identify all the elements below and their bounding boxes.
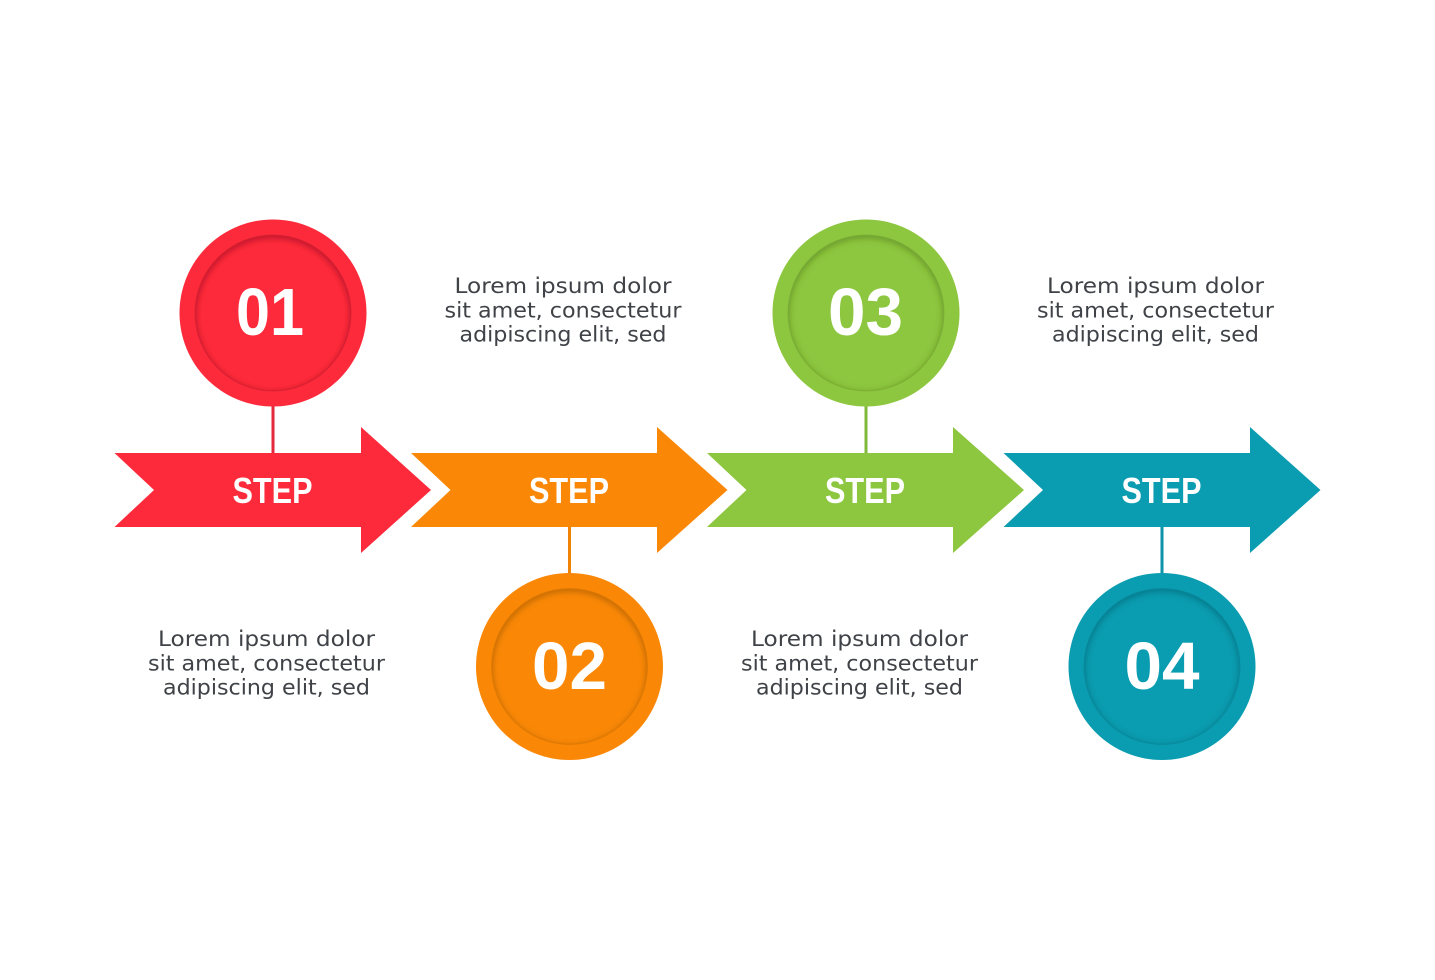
arrow 1 <box>114 427 431 553</box>
text block 3 <box>741 627 978 700</box>
text block 2 <box>444 274 682 346</box>
arrow 4 <box>1004 427 1320 553</box>
arrow 2 <box>411 427 728 553</box>
text block 2: adipiscing elit, sed <box>460 322 666 346</box>
text block 4: sit amet, consectetur <box>1037 298 1274 322</box>
arrow label 2: STEP <box>529 470 609 511</box>
text block 2: Lorem ipsum dolor <box>454 274 672 298</box>
text block 1: Lorem ipsum dolor <box>158 627 375 651</box>
connector 3 <box>864 400 868 456</box>
text block 4: adipiscing elit, sed <box>1052 322 1259 346</box>
connector 2 <box>568 524 571 580</box>
text block 1 <box>148 627 385 700</box>
text block 4: Lorem ipsum dolor <box>1047 274 1264 298</box>
text block 1: sit amet, consectetur <box>148 652 385 676</box>
text block 3: sit amet, consectetur <box>741 652 978 676</box>
connector 4 <box>1160 524 1164 580</box>
number badge 4 <box>1068 573 1256 760</box>
text block 1: adipiscing elit, sed <box>163 676 370 700</box>
number badge 2 <box>476 573 663 760</box>
arrow label 3: STEP <box>825 470 905 511</box>
step 3 <box>707 220 1024 700</box>
number badge 1 <box>180 220 366 406</box>
number badge 4: 04 <box>1124 629 1200 704</box>
number badge 2: 02 <box>532 629 607 704</box>
number badge 3: 03 <box>828 275 903 350</box>
text block 3: Lorem ipsum dolor <box>751 627 968 651</box>
step 2 <box>411 274 728 760</box>
step 4 <box>1004 274 1320 760</box>
arrow 3 <box>707 427 1024 553</box>
connector 1 <box>272 400 274 456</box>
arrow label 4: STEP <box>1122 470 1202 511</box>
text block 3: adipiscing elit, sed <box>756 676 963 700</box>
step 1 <box>114 220 431 700</box>
infographic <box>114 220 1320 760</box>
text block 2: sit amet, consectetur <box>444 298 682 322</box>
arrow label 1: STEP <box>232 470 312 511</box>
number badge 1: 01 <box>236 275 304 350</box>
number badge 3 <box>772 220 960 406</box>
text block 4 <box>1037 274 1274 346</box>
